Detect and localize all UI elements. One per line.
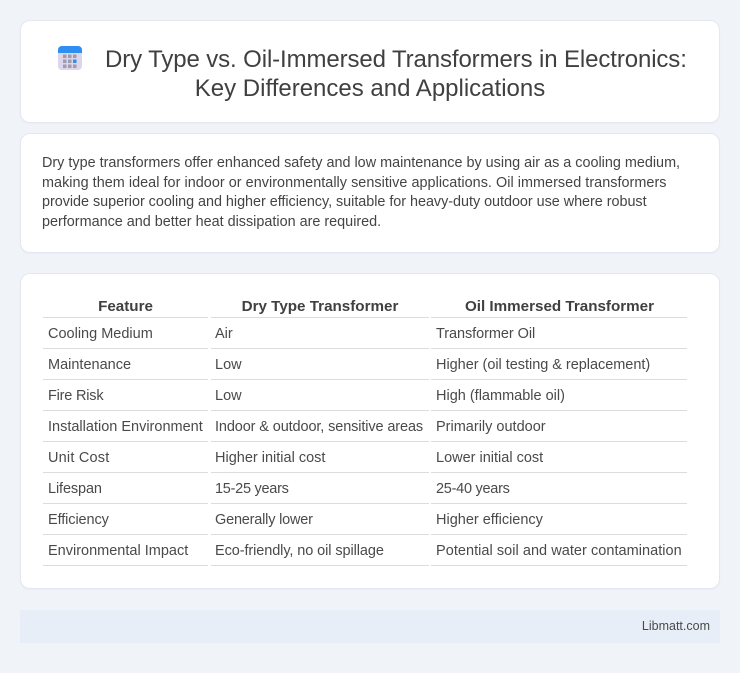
panel: comparison table card xyxy=(20,273,720,589)
comparison table: Air xyxy=(215,326,233,342)
title: Dry Type vs. Oil-Immersed Transformers in Electronics: xyxy=(105,46,687,73)
comparison table: Primarily outdoor xyxy=(436,419,546,435)
comparison table: Higher (oil testing & replacement) xyxy=(436,357,650,373)
icon: calendar grid xyxy=(58,46,82,70)
comparison table: Potential soil and water contamination xyxy=(436,543,682,559)
comparison table: Low xyxy=(215,388,242,404)
comparison table: Environmental Impact xyxy=(48,543,188,559)
comparison table: 15-25 years xyxy=(215,481,289,497)
comparison table: Oil Immersed Transformer xyxy=(465,298,654,315)
intro text: provide superior cooling and higher efficiency, suitable for heavy-duty outdoor use where robust xyxy=(42,194,647,210)
title xyxy=(105,46,687,102)
comparison table: Maintenance xyxy=(48,357,131,373)
intro text: performance and better heat dissipation are required. xyxy=(42,214,381,230)
comparison table: 25-40 years xyxy=(436,481,510,497)
comparison table: Feature xyxy=(98,298,153,315)
footer text: Libmatt.com xyxy=(642,619,710,633)
comparison table xyxy=(43,298,687,566)
comparison table: High (flammable oil) xyxy=(436,388,565,404)
comparison table: Lower initial cost xyxy=(436,450,543,466)
footer bar xyxy=(20,610,720,643)
panel: title card xyxy=(20,20,720,123)
comparison table: Cooling Medium xyxy=(48,326,153,342)
intro text: Dry type transformers offer enhanced safety and low maintenance by using air as a cooling medium, xyxy=(42,155,680,171)
comparison table: Efficiency xyxy=(48,512,109,528)
comparison table: Generally lower xyxy=(215,512,313,528)
intro text: making them ideal for indoor or environmentally sensitive applications. Oil immersed transformers xyxy=(42,175,667,191)
comparison table: Eco-friendly, no oil spillage xyxy=(215,543,384,559)
comparison table: Transformer Oil xyxy=(436,326,535,342)
comparison table: Indoor & outdoor, sensitive areas xyxy=(215,419,423,435)
comparison table: Lifespan xyxy=(48,481,102,497)
comparison table: Higher initial cost xyxy=(215,450,325,466)
comparison table: Dry Type Transformer xyxy=(242,298,398,315)
comparison table: Higher efficiency xyxy=(436,512,543,528)
intro text xyxy=(42,155,680,230)
comparison table: Installation Environment xyxy=(48,419,203,435)
comparison table: Unit Cost xyxy=(48,450,109,466)
comparison table: Low xyxy=(215,357,242,373)
title: Key Differences and Applications xyxy=(195,75,545,102)
comparison table: Fire Risk xyxy=(48,388,103,404)
panel: intro card xyxy=(20,133,720,253)
